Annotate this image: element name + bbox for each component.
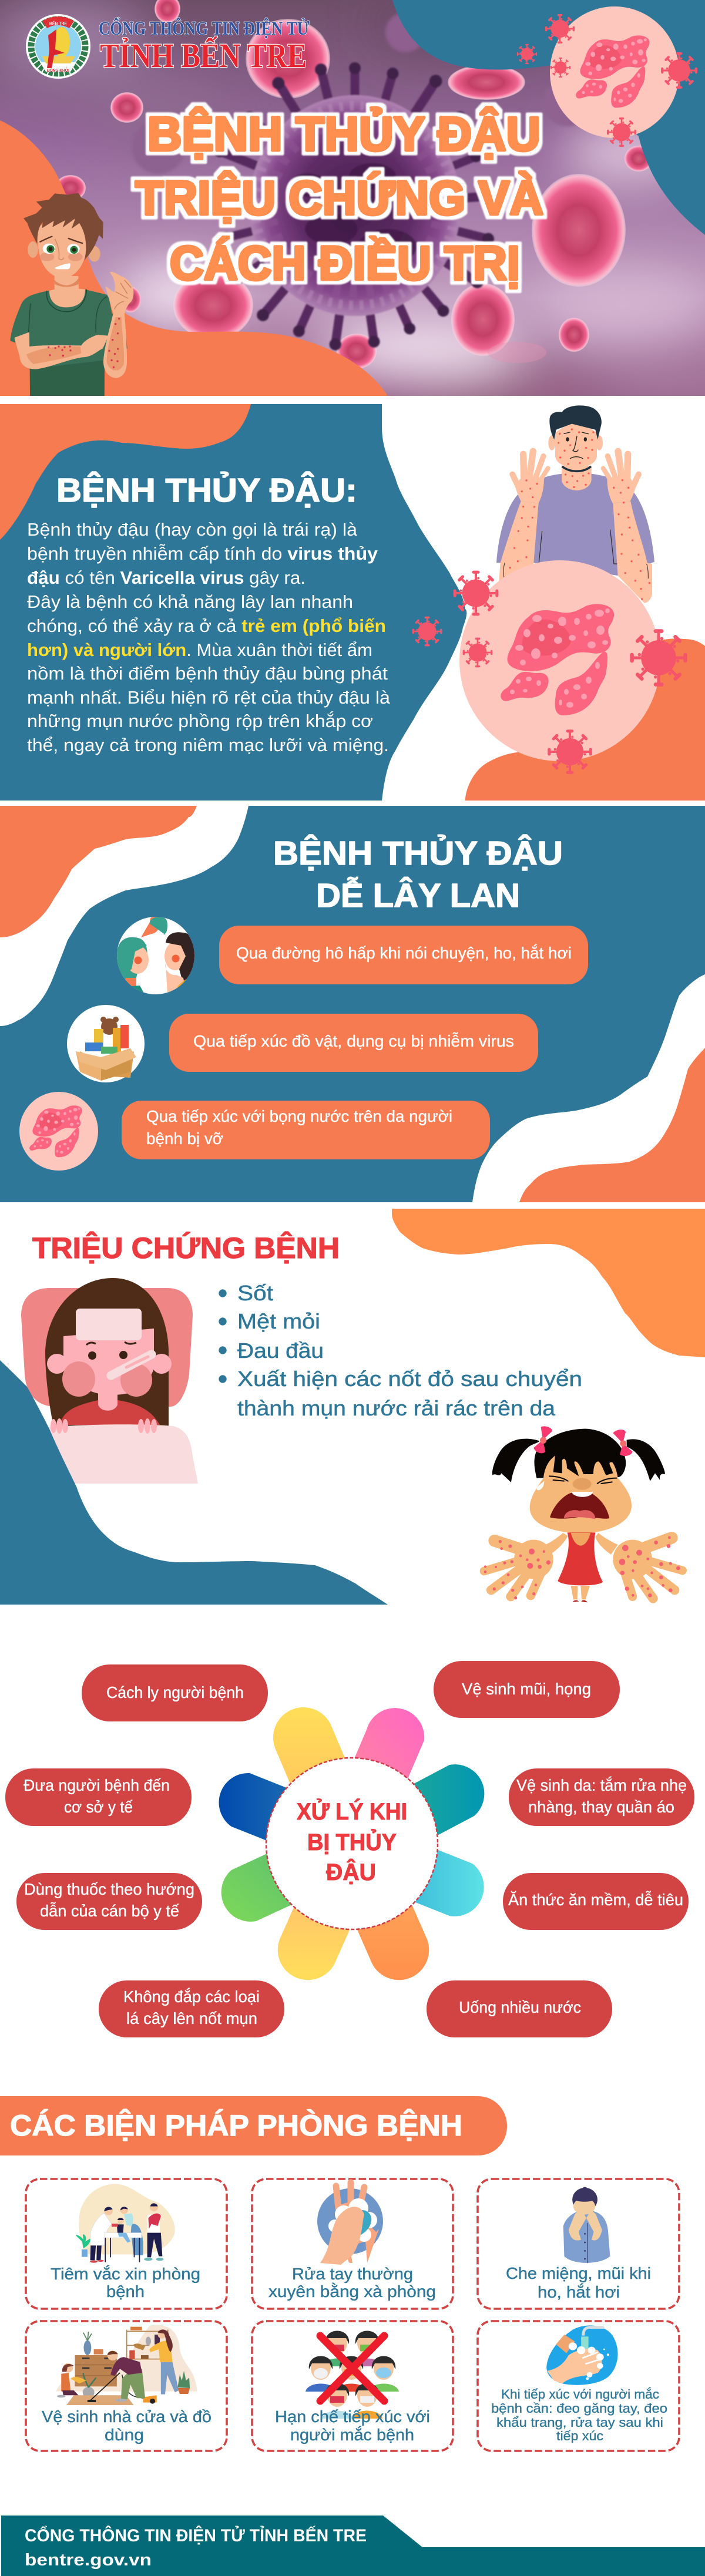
caption: Che miệng, mũi khi [506,2264,651,2282]
card: limit contact [252,2321,453,2451]
symptom list: thành mụn nước rải rác trên da [237,1396,556,1420]
title: TRIỆU CHỨNG VÀ [135,171,543,225]
body text: mạnh nhất. Biểu hiện rõ rệt của thủy đậu là [27,687,391,708]
icon: crossed out people in masks [306,2330,399,2419]
heading: BỆNH THỦY ĐẬU: [56,471,357,509]
caption: ho, hắt hơi [538,2283,620,2301]
symptom list: Sốt [237,1281,273,1305]
pill: go to medical facility: cơ sở y tế [64,1798,133,1816]
pill: clean nose and throat: Vệ sinh mũi, họng [462,1680,591,1698]
caption: Rửa tay thường [292,2265,413,2283]
pill: no leaves on blisters: Không đắp các loại [123,1988,260,2006]
logo: Bến Tre emblem [26,14,90,79]
pill: clean nose and throat [434,1661,620,1718]
pill: contact with blisters: Qua tiếp xúc với bọng nước trên da người [146,1107,452,1125]
caption: bệnh cần: đeo găng tay, đeo [491,2401,667,2416]
body text: chóng, có thể xảy ra ở cả trẻ em (phổ biến [27,616,386,636]
body text: đậu có tên Varicella virus gây ra. [27,567,306,588]
large virus [212,62,504,351]
orange blob top right [392,1209,705,1357]
caption [275,2407,430,2444]
caption [42,2407,212,2444]
pill: go to medical facility: Đưa người bệnh đến [24,1776,170,1794]
icon: blisters [19,1092,98,1171]
pill: drink water: Uống nhiều nước [459,1998,581,2016]
icon: box of toys [67,1005,145,1082]
card: vaccination [26,2179,227,2309]
site name: TỈNH BẾN TRE [100,36,307,75]
card: house cleaning [26,2321,227,2451]
logo: Bến Tre emblem: ĐỒNG KHỞI [47,67,69,73]
pill: contact with blisters [122,1101,490,1159]
pill: medicine [16,1873,202,1930]
pill: skin hygiene: nhàng, thay quần áo [528,1798,674,1816]
panel: hero banner [0,0,705,402]
footer: bentre.gov.vn [25,2551,152,2570]
orange wave bottom right [519,1048,705,1202]
virus icons [518,15,696,146]
icon: soap and hands [317,2182,383,2265]
illustration: crying girl [484,1426,683,1602]
pill: isolate patient: Cách ly người bệnh [106,1683,244,1701]
illustration: boy with rash [10,193,133,396]
centre circle with heading: ĐẬU [326,1858,376,1885]
icon: two people talking [116,917,196,998]
orange shape behind circle [465,638,705,801]
caption: bệnh [106,2282,145,2301]
pill: medicine: Dùng thuốc theo hướng [24,1880,194,1898]
blue blob bottom left [0,1360,388,1605]
panel: symptoms [0,1209,705,1605]
virus icons [413,572,685,772]
orange corner shape [0,404,258,545]
pill: skin hygiene: Vệ sinh da: tắm rửa nhẹ [516,1776,687,1794]
illustration: sick girl in bed [21,1278,198,1484]
centre circle with heading [266,1758,438,1929]
caption: Vệ sinh nhà cửa và đồ [42,2407,212,2426]
body text: bệnh truyền nhiễm cấp tính do virus thủy [27,543,378,564]
icon: family at vaccination [76,2184,175,2263]
caption: dùng [105,2426,144,2444]
skin rash circle [459,560,660,761]
panel: treatment flower diagram [5,1661,694,2037]
caption [491,2387,667,2443]
body text: Đây là bệnh có khả năng lây lan nhanh [27,591,353,612]
pill: drink water [427,1980,612,2037]
orange blob lower left [0,120,388,396]
blue background [0,806,705,1202]
caption: người mắc bệnh [290,2426,414,2444]
pill: go to medical facility [5,1768,192,1826]
symptom list: Xuất hiện các nốt đỏ sau chuyển [237,1367,582,1391]
centre circle with heading: XỬ LÝ KHI [297,1798,407,1825]
caption [268,2265,436,2301]
pill: skin hygiene [509,1768,694,1826]
pill: respiratory spread: Qua đường hô hấp khi nói chuyện, ho, hắt hơi [236,944,572,962]
body text: thể, ngay cả trong niêm mạc lưỡi và miệng. [27,735,389,755]
blood cells [55,0,653,369]
caption [506,2264,651,2301]
icon: family cleaning [56,2325,197,2405]
heading: prevention [0,2096,507,2155]
blue text panel [0,404,466,801]
card: cover mouth [478,2179,679,2309]
body text: Bệnh thủy đậu (hay còn gọi là trái rạ) là [27,519,358,540]
card: protection when in contact [478,2321,679,2451]
blue blob top right [392,0,705,235]
body text: hơn) và người lớn. Mùa xuân thời tiết ẩm [27,640,372,660]
card: hand washing [252,2179,453,2309]
flower petals [219,1707,484,1980]
heading: prevention: CÁC BIỆN PHÁP PHÒNG BỆNH [10,2109,462,2142]
symptom list: Đau đầu [237,1339,324,1363]
pill: isolate patient [82,1664,268,1721]
heading: TRIỆU CHỨNG BỆNH [32,1232,340,1265]
title [135,107,543,290]
caption [51,2265,200,2301]
caption: Hạn chế tiếp xúc với [275,2407,430,2426]
icon: washing hands under tap [546,2325,617,2385]
pill: respiratory spread [219,926,588,984]
panel: how it spreads [0,806,705,1202]
illustration: man with rash [496,405,654,603]
pill: contact with objects [169,1014,538,1072]
panel: what is chickenpox [0,404,705,801]
centre circle with heading: BỊ THỦY [307,1828,397,1855]
pill: no leaves on blisters [99,1980,284,2037]
white wave bottom right [472,974,705,1202]
body text: những mụn nước phồng rộp trên khắp cơ [27,711,373,731]
caption: khẩu trang, rửa tay sau khi [496,2415,663,2430]
heading: BỆNH THỦY ĐẬU [273,834,563,872]
site name: CỔNG THÔNG TIN ĐIỆN TỬ [99,16,310,39]
pill: soft food: Ăn thức ăn mềm, dễ tiêu [508,1891,683,1909]
pill: contact with objects: Qua tiếp xúc đồ vật, dụng cụ bị nhiễm virus [193,1032,514,1050]
orange wave top left [0,806,197,937]
symptom list [219,1281,582,1420]
caption: tiếp xúc [556,2429,603,2443]
skin rash circle [550,6,679,138]
heading [273,834,563,914]
footer [1,2516,705,2576]
caption: xuyên bằng xà phòng [268,2282,436,2301]
pill: contact with blisters: bệnh bị vỡ [146,1129,223,1148]
heading: DỄ LÂY LAN [316,876,520,914]
footer: CỔNG THÔNG TIN ĐIỆN TỬ TỈNH BẾN TRE [25,2525,367,2545]
pill: medicine: dẫn của cán bộ y tế [40,1902,179,1920]
hero background: virus photograph [0,0,705,402]
pill: no leaves on blisters: lá cây lên nốt mụn [126,2009,257,2027]
symptom list: Mệt mỏi [237,1309,320,1333]
pill: soft food [503,1873,689,1930]
body text: nồm là thời điểm bệnh thủy đậu bùng phát [27,663,388,684]
caption: Khi tiếp xúc với người mắc [501,2387,659,2402]
icon: person covering mouth [563,2187,610,2263]
body text [27,519,391,755]
logo: Bến Tre emblem: BẾN TRE [49,21,68,26]
site name [99,16,310,75]
white wave top left [0,806,249,1026]
title: BỆNH THỦY ĐẬU [147,107,540,161]
title: CÁCH ĐIỀU TRỊ [170,237,520,290]
caption: Tiêm vắc xin phòng [51,2265,200,2283]
